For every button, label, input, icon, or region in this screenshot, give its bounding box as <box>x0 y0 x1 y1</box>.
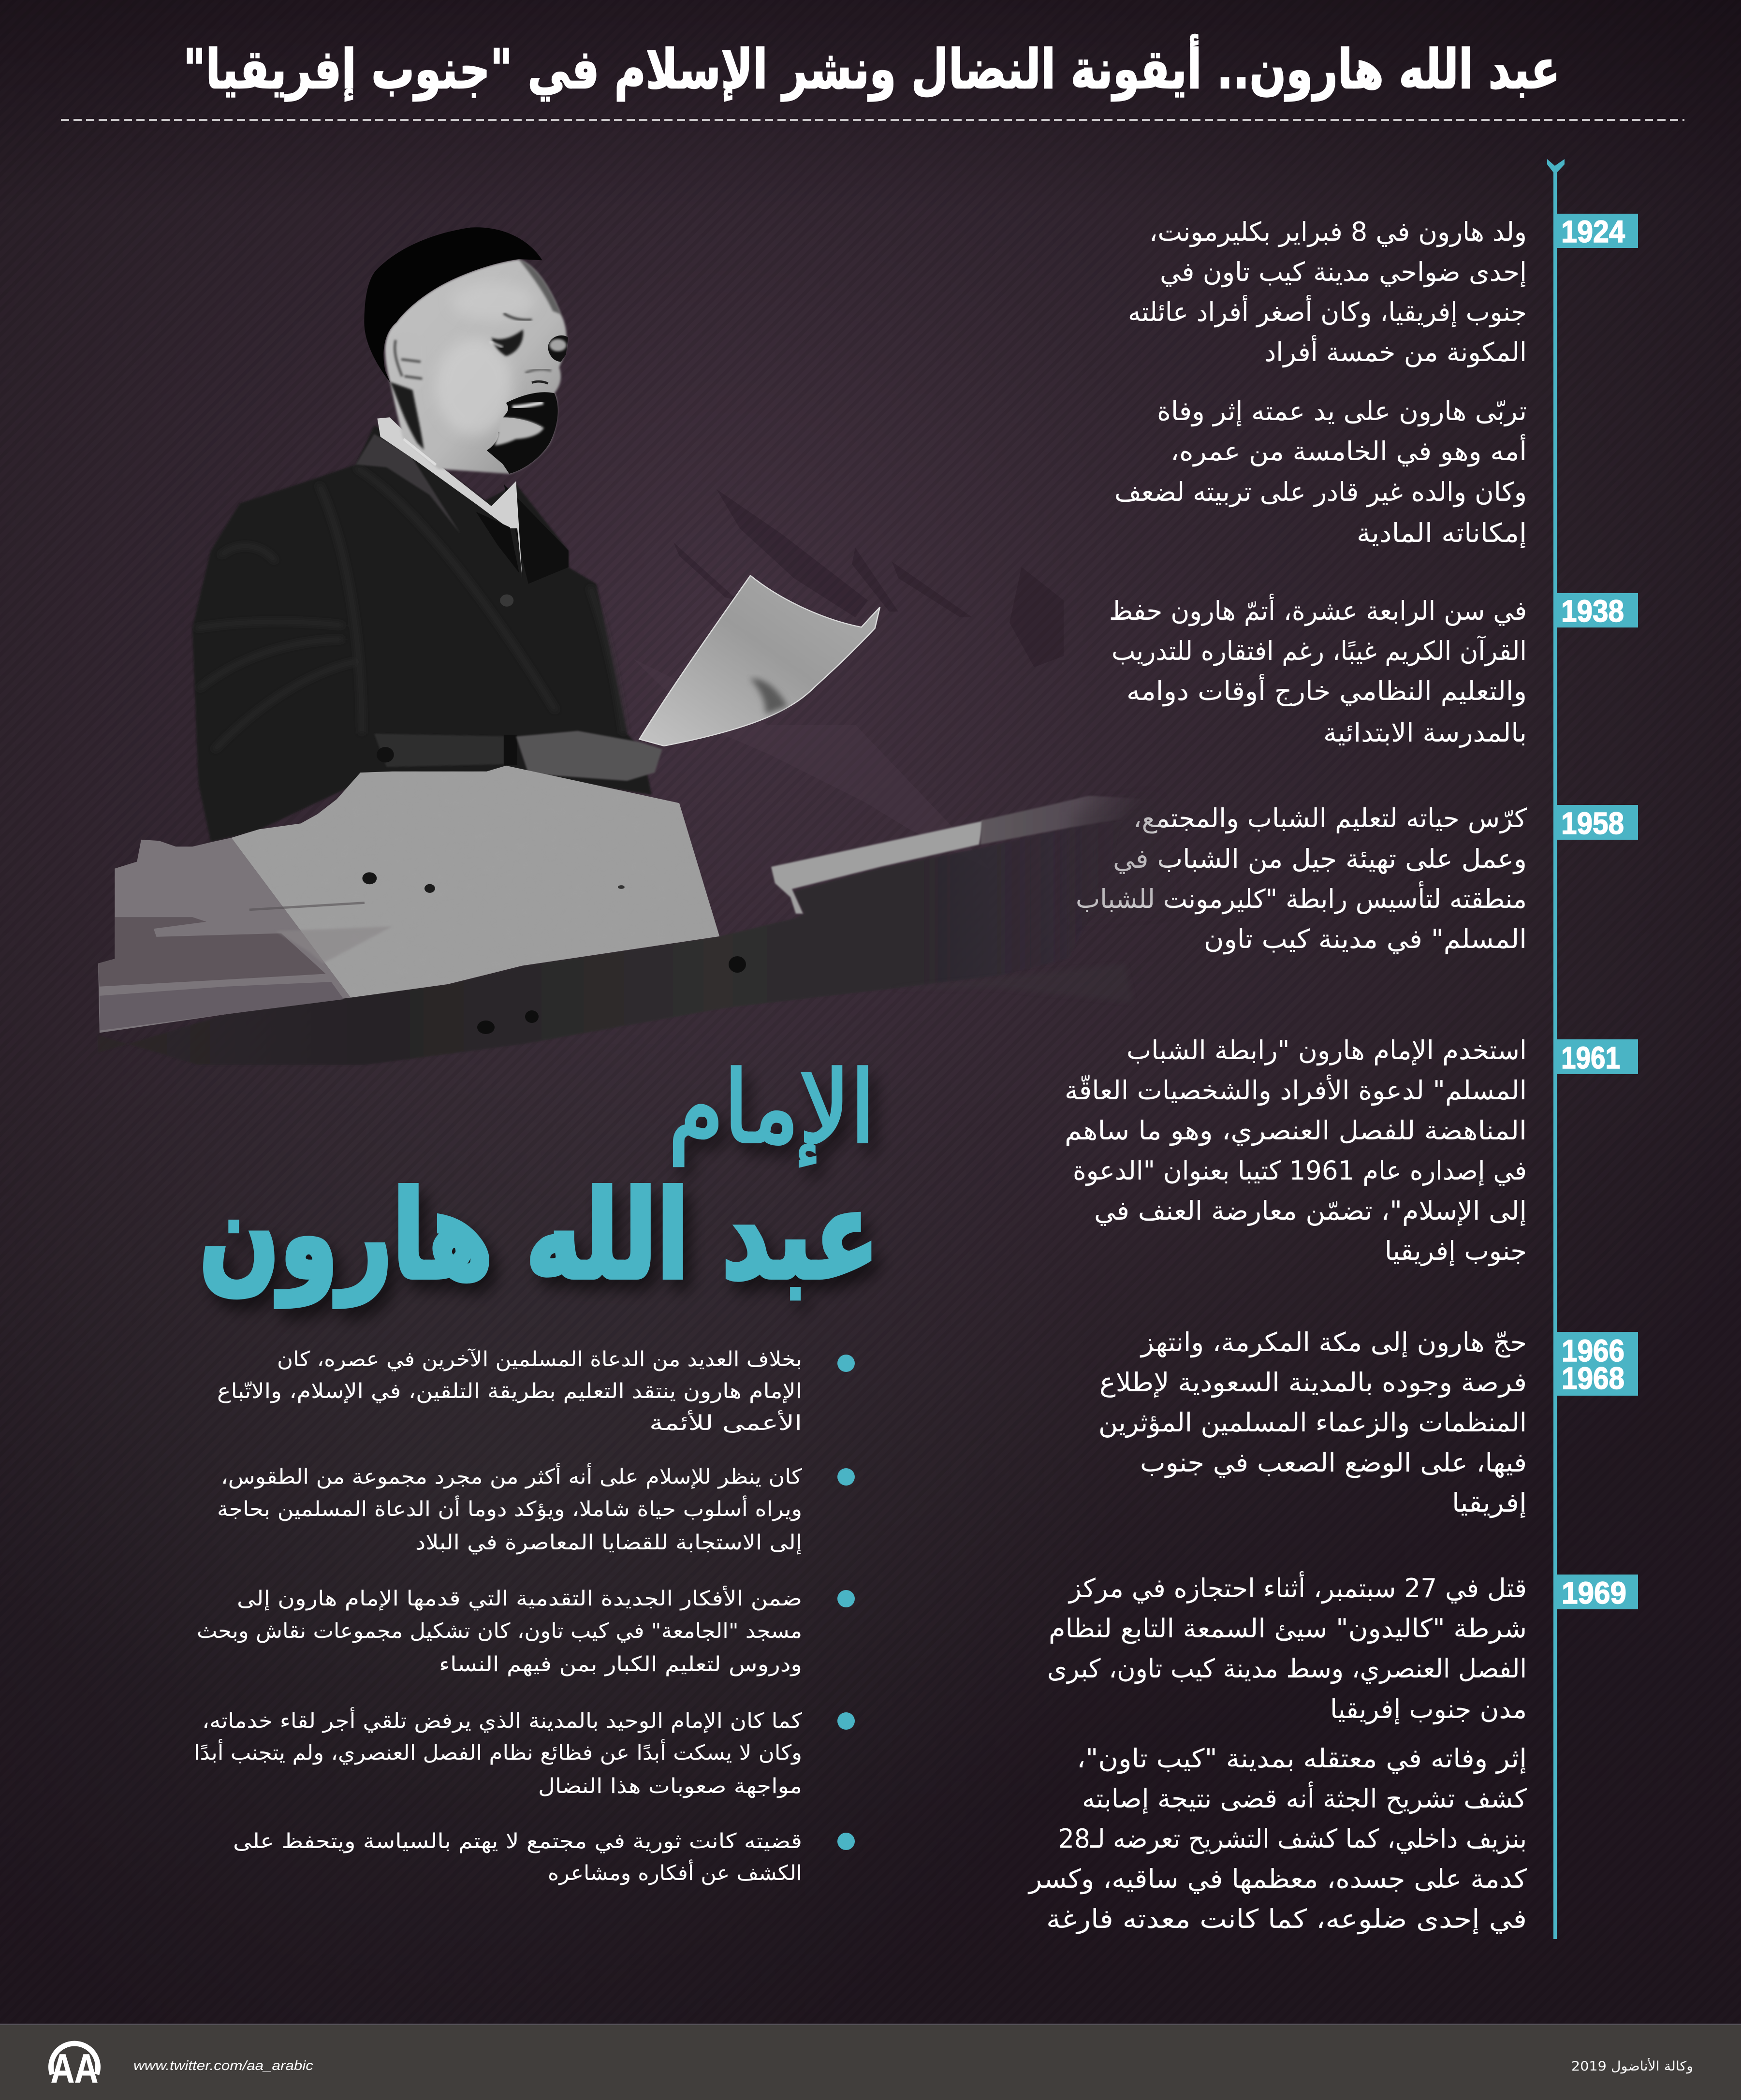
hand <box>516 731 662 781</box>
lectern front <box>98 766 719 1033</box>
moustache, mouth and goatee <box>487 392 558 474</box>
text 1961: جنوب إفريقيا <box>1385 1236 1527 1266</box>
text 1969: كشف تشريح الجثة أنه قضى نتيجة إصابته <box>1082 1781 1527 1814</box>
text 1938: والتعليم النظامي خارج أوقات دوامه <box>1127 674 1527 706</box>
paper <box>639 575 880 746</box>
bullet 4 <box>194 1707 855 1798</box>
text 1938: في سن الرابعة عشرة، أتمّ هارون حفظ <box>1109 594 1527 626</box>
text 1924 <box>1114 217 1527 548</box>
text 1966 <box>1098 1327 1527 1518</box>
text 1966: حجّ هارون إلى مكة المكرمة، وانتهز <box>1140 1327 1527 1358</box>
bullet 4: مواجهة صعوبات هذا النضال <box>538 1774 802 1798</box>
year 1966 1968 <box>1553 1332 1638 1396</box>
timeline axis with arrow <box>1547 159 1565 1939</box>
year 1961: 1961 <box>1561 1040 1620 1075</box>
text 1969: في إحدى ضلوعه، كما كانت معدته فارغة <box>1046 1904 1527 1934</box>
text 1966: فيها، على الوضع الصعب في جنوب <box>1140 1447 1527 1478</box>
text 1961: المناهضة للفصل العنصري، وهو ما ساهم <box>1065 1115 1527 1146</box>
bullet 3: ضمن الأفكار الجديدة التقدمية التي قدمها الإمام هارون إلى <box>237 1585 802 1611</box>
year 1938: 1938 <box>1561 594 1624 628</box>
bullet 4: وكان لا يسكت أبدًا عن فظائع نظام الفصل العنصري، ولم يتجنب أبدًا <box>194 1739 802 1765</box>
text 1961: إلى الإسلام"، تضمّن معارضة العنف في <box>1094 1196 1527 1226</box>
heading: name: عبد الله هارون <box>199 1165 879 1307</box>
footer link: www.twitter.com/aa_arabic <box>133 2058 313 2073</box>
year 1966 1968: 1966 <box>1562 1333 1624 1368</box>
brow <box>504 313 532 320</box>
text 1924: وكان والده غير قادر على تربيته لضعف <box>1114 477 1527 507</box>
text 1958 <box>1076 803 1527 954</box>
lectern dark rail <box>98 821 1122 1065</box>
bullet 5: قضيته كانت ثورية في مجتمع لا يهتم بالسياسة ويتحفظ على <box>233 1829 802 1853</box>
bullet 5: الكشف عن أفكاره ومشاعره <box>548 1859 802 1885</box>
face <box>385 260 567 474</box>
bullet 3 <box>197 1585 855 1677</box>
text 1938: بالمدرسة الابتدائية <box>1323 717 1527 748</box>
footer bar <box>0 2024 1741 2100</box>
year 1958: 1958 <box>1561 806 1624 841</box>
text 1966: المنظمات والزعماء المسلمين المؤثرين <box>1098 1407 1527 1438</box>
text 1961: في إصداره عام 1961 كتيبا بعنوان "الدعوة <box>1073 1155 1527 1186</box>
bullet 1: الإمام هارون ينتقد التعليم بطريقة التلقين، في الإسلام، والاتّباع <box>217 1379 802 1403</box>
text 1969 <box>1027 1571 1527 1934</box>
bullet 4: كما كان الإمام الوحيد بالمدينة الذي يرفض تلقي أجر لقاء خدماته، <box>202 1707 803 1733</box>
text 1924: تربّى هارون على يد عمته إثر وفاة <box>1157 396 1527 426</box>
text 1924: إمكاناته المادية <box>1357 518 1527 548</box>
bullet 2 <box>217 1463 855 1555</box>
text 1969: إثر وفاته في معتقله بمدينة "كيب تاون"، <box>1077 1743 1527 1774</box>
brush strokes behind the paper <box>673 489 1064 667</box>
text 1961: المسلم" لدعوة الأفراد والشخصيات العاقّة <box>1065 1074 1527 1106</box>
sleeve cuff <box>374 734 510 767</box>
collar edge <box>404 439 436 465</box>
bullet 1 <box>217 1347 855 1435</box>
lectern overlay dimming the 1958 text <box>1071 798 1170 919</box>
cap <box>364 227 542 383</box>
year 1969: 1969 <box>1562 1575 1626 1610</box>
light brush band <box>633 659 1069 958</box>
year 1966 1968: 1968 <box>1562 1361 1624 1396</box>
rail holes <box>477 956 746 1034</box>
eye <box>492 330 523 356</box>
bullet 1: بخلاف العديد من الدعاة المسلمين الآخرين في عصره، كان <box>277 1347 802 1371</box>
bullet 5 <box>233 1829 855 1885</box>
text 1969: بنزيف داخلي، كما كشف التشريح تعرضه لـ28 <box>1058 1823 1527 1854</box>
nose <box>526 369 551 373</box>
bullet 1: الأعمى للأئمة <box>649 1410 802 1435</box>
text 1924: ولد هارون في 8 فبراير بكليرمونت، <box>1149 217 1527 247</box>
text 1969: كدمة على جسده، معظمها في ساقيه، وكسر <box>1027 1864 1527 1894</box>
bullet 2: ويراه أسلوب حياة شاملا، ويؤكد دوما أن الدعاة المسلمين بحاجة <box>217 1495 802 1521</box>
lectern right ledge <box>771 796 1141 1003</box>
bullet 3: ودروس لتعليم الكبار بمن فيهم النساء <box>439 1652 802 1677</box>
text 1961 <box>1065 1035 1527 1266</box>
text 1969: الفصل العنصري، وسط مدينة كيب تاون، كبرى <box>1047 1653 1527 1684</box>
illustration: portrait of the imam at a lectern <box>98 227 1141 1065</box>
text 1958: المسلم" في مدينة كيب تاون <box>1204 924 1527 954</box>
text 1961: استخدم الإمام هارون "رابطة الشباب <box>1127 1035 1527 1065</box>
ear <box>387 332 424 389</box>
icon: agency logo: AA <box>51 2046 98 2091</box>
text 1958: كرّس حياته لتعليم الشباب والمجتمع، <box>1133 803 1527 834</box>
footer credit: وكالة الأناضول 2019 <box>1571 2057 1693 2074</box>
shirt and tie <box>377 417 522 578</box>
text 1924: جنوب إفريقيا، وكان أصغر أفراد عائلته <box>1128 295 1527 327</box>
jacket <box>192 417 880 842</box>
text 1966: فرصة وجوده بالمدينة السعودية لإطلاع <box>1099 1367 1527 1398</box>
text 1924: أمه وهو في الخامسة من عمره، <box>1170 434 1527 467</box>
bullet list <box>194 1347 855 1885</box>
bullet 2: كان ينظر للإسلام على أنه أكثر من مجرد مجموعة من الطقوس، <box>221 1463 803 1489</box>
text 1969: شرطة "كاليدون" سيئ السمعة التابع لنظام <box>1049 1613 1527 1644</box>
heading: imam: الإمام <box>668 1050 875 1167</box>
temple shadow <box>519 260 561 314</box>
text 1924: إحدى ضواحي مدينة كيب تاون في <box>1160 257 1527 287</box>
year 1924: 1924 <box>1561 214 1625 249</box>
neck shadow <box>390 382 424 450</box>
head <box>364 227 568 474</box>
chin <box>495 418 544 446</box>
text 1969: قتل في 27 سبتمبر، أثناء احتجازه في مركز <box>1068 1571 1527 1604</box>
text 1969: مدن جنوب إفريقيا <box>1330 1694 1527 1724</box>
far eye <box>548 335 568 362</box>
text 1958: منطقته لتأسيس رابطة "كليرمونت للشباب <box>1076 881 1527 914</box>
bullet 2: إلى الاستجابة للقضايا المعاصرة في البلاد <box>415 1531 802 1555</box>
text 1938 <box>1109 594 1527 748</box>
text 1924: المكونة من خمسة أفراد <box>1264 335 1527 367</box>
bullet 3: مسجد "الجامعة" في كيب تاون، كان تشكيل مجموعات نقاش وبحث <box>197 1619 802 1643</box>
text 1966: إفريقيا <box>1452 1488 1527 1518</box>
text 1958: وعمل على تهيئة جيل من الشباب في <box>1113 844 1527 874</box>
text 1938: القرآن الكريم غيبًا، رغم افتقاره للتدريب <box>1112 635 1527 666</box>
